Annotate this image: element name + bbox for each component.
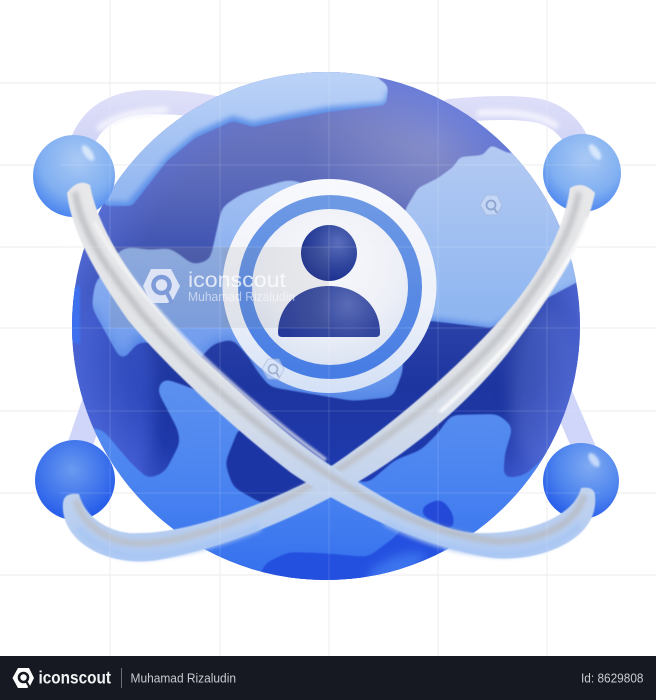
back orbit rings	[79, 102, 584, 448]
ocean pool	[226, 430, 306, 502]
icon: small watermark right	[480, 195, 502, 215]
tube shading	[76, 192, 579, 543]
front tube: top left to bottom right	[67, 183, 595, 558]
badge outer ring	[222, 179, 436, 393]
ring: bottom left	[79, 398, 96, 448]
footer id: Id: 8629808	[581, 670, 644, 686]
footer bar	[0, 656, 656, 700]
badge: user profile	[222, 179, 436, 393]
watermark brand: iconscout	[188, 269, 286, 292]
watermark author: Muhamad Rizaludin	[188, 290, 295, 304]
land: east continent	[405, 146, 576, 328]
globe	[72, 72, 580, 580]
ball: top left	[33, 135, 115, 217]
land: central and west continent	[92, 180, 403, 401]
front tube: top right to bottom left	[63, 185, 595, 561]
ball: bottom left	[35, 440, 115, 520]
badge blue ring	[238, 195, 422, 379]
ring: bottom right	[560, 392, 584, 448]
ball: bottom right	[543, 443, 619, 519]
icon: small watermark lower	[262, 359, 284, 379]
footer divider	[121, 668, 122, 688]
badge inner disc	[252, 209, 408, 365]
left rim highlight	[72, 285, 81, 345]
globe base	[72, 72, 580, 580]
footer brand: iconscout	[38, 668, 111, 688]
icon: user head	[301, 225, 357, 281]
ring: top left	[83, 102, 215, 140]
southern dark patches	[261, 500, 454, 580]
footer author: Muhamad Rizaludin	[130, 670, 236, 686]
grid overlay on artwork	[60, 60, 600, 590]
land: southern continents	[94, 380, 544, 580]
tube shading	[75, 192, 584, 541]
ring: top right	[450, 108, 576, 140]
icon: footer logo	[12, 668, 34, 688]
ball: top right	[543, 134, 621, 212]
watermark band	[110, 247, 329, 328]
watermark: iconscout	[143, 269, 295, 304]
land: north cap	[104, 72, 388, 206]
icon: user body	[278, 286, 380, 337]
icon: watermark logo	[143, 269, 180, 303]
orbit balls	[33, 134, 621, 520]
